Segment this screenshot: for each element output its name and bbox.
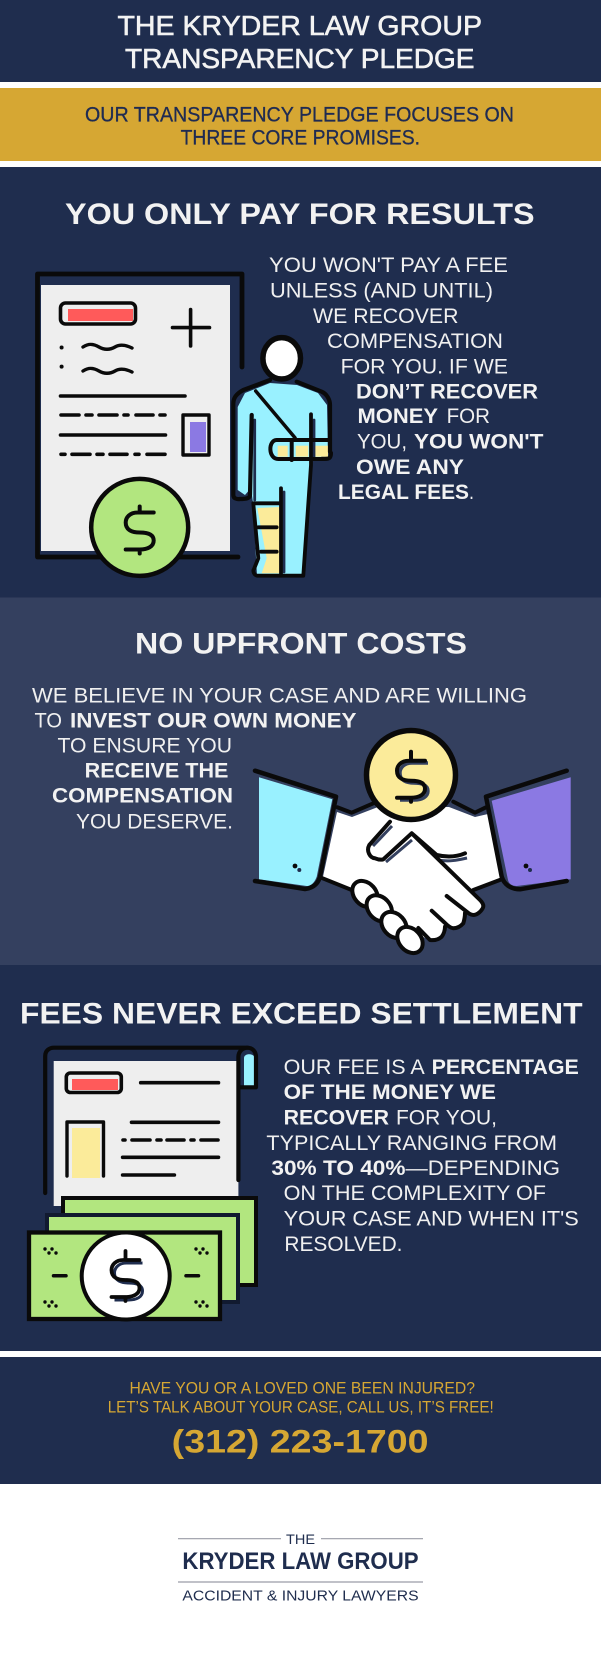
body text: you won't pay a fee: WE RECOVER: [313, 305, 458, 328]
body text: our fee is a percentage: TYPICALLY RANGING FROM: [266, 1132, 557, 1155]
call to action banner: HAVE YOU OR A LOVED ONE BEEN INJURED?: [130, 1379, 475, 1397]
body text: we believe in your case: TO: [34, 710, 62, 733]
call to action banner: [0, 1357, 601, 1484]
body text: our fee is a percentage: OF THE MONEY WE: [284, 1081, 496, 1104]
icon: injured person in cast: [233, 338, 331, 576]
body text: our fee is a percentage: YOUR CASE AND WHEN IT'S: [284, 1207, 579, 1230]
title banner: [0, 0, 601, 82]
icon: fee agreement document and cash: [29, 1048, 256, 1320]
gold intro band: [0, 88, 601, 161]
body text: our fee is a percentage: OUR FEE IS A: [284, 1056, 425, 1079]
logo: the kryder law group: ACCIDENT & INJURY LAWYERS: [182, 1589, 419, 1605]
phone number: (312) 223-1700: [172, 1424, 428, 1460]
body text: our fee is a percentage: [266, 1056, 579, 1256]
body text: we believe in your case: COMPENSATION: [52, 785, 233, 808]
body text: you won't pay a fee: [269, 254, 544, 504]
body text: you won't pay a fee: OWE ANY: [356, 456, 464, 479]
logo: the kryder law group: [178, 1531, 423, 1605]
body text: our fee is a percentage: RESOLVED.: [284, 1233, 402, 1256]
panel: you only pay for results: [0, 167, 601, 598]
heading: no upfront costs: NO UPFRONT COSTS: [135, 627, 467, 660]
gold intro band: OUR TRANSPARENCY PLEDGE FOCUSES ON: [85, 104, 514, 127]
body text: we believe in your case: [32, 685, 527, 834]
body text: our fee is a percentage: ON THE COMPLEXITY OF: [284, 1182, 546, 1205]
body text: we believe in your case: RECEIVE THE: [85, 760, 228, 783]
body text: you won't pay a fee: UNLESS (AND UNTIL): [270, 279, 493, 302]
body text: you won't pay a fee: YOU WON'T PAY A FEE: [269, 254, 508, 277]
logo: the kryder law group: THE: [286, 1531, 315, 1547]
body text: you won't pay a fee: YOU,: [357, 430, 407, 454]
body text: you won't pay a fee: .: [469, 481, 474, 504]
body text: you won't pay a fee: DON’T RECOVER: [356, 380, 538, 403]
body text: you won't pay a fee: MONEY: [358, 405, 438, 428]
body text: you won't pay a fee: YOU WON'T: [414, 430, 544, 454]
title banner: THE KRYDER LAW GROUP: [118, 10, 482, 41]
heading: you only pay for results: YOU ONLY PAY FOR RESULTS: [65, 198, 535, 231]
body text: we believe in your case: INVEST OUR OWN MONEY: [70, 710, 356, 733]
panel: fees never exceed settlement: [0, 965, 601, 1351]
panel: no upfront costs: [0, 598, 601, 966]
body text: you won't pay a fee: COMPENSATION: [327, 330, 503, 353]
icon: handshake with dollar coin: [255, 730, 571, 958]
icon: medical bill with coin: [38, 274, 242, 576]
heading: fees never exceed settlement: FEES NEVER EXCEED SETTLEMENT: [20, 997, 583, 1030]
body text: our fee is a percentage: RECOVER: [284, 1106, 389, 1129]
body text: you won't pay a fee: LEGAL FEES: [338, 481, 469, 504]
body text: our fee is a percentage: 30% TO 40%: [271, 1157, 406, 1180]
body text: you won't pay a fee: FOR: [447, 405, 490, 428]
logo: the kryder law group: KRYDER LAW GROUP: [182, 1548, 419, 1575]
body text: our fee is a percentage: —DEPENDING: [406, 1157, 560, 1180]
body text: you won't pay a fee: FOR YOU. IF WE: [341, 356, 508, 378]
title banner: TRANSPARENCY PLEDGE: [125, 43, 474, 74]
body text: we believe in your case: WE BELIEVE IN YOUR CASE AND ARE WILLING: [32, 685, 527, 708]
gold intro band: THREE CORE PROMISES.: [181, 127, 420, 150]
body text: our fee is a percentage: PERCENTAGE: [432, 1056, 579, 1079]
body text: we believe in your case: YOU DESERVE.: [76, 811, 233, 834]
body text: we believe in your case: TO ENSURE YOU: [58, 735, 232, 758]
body text: our fee is a percentage: FOR YOU,: [396, 1106, 497, 1129]
call to action banner: LET’S TALK ABOUT YOUR CASE, CALL US, IT’S FREE!: [108, 1398, 494, 1416]
